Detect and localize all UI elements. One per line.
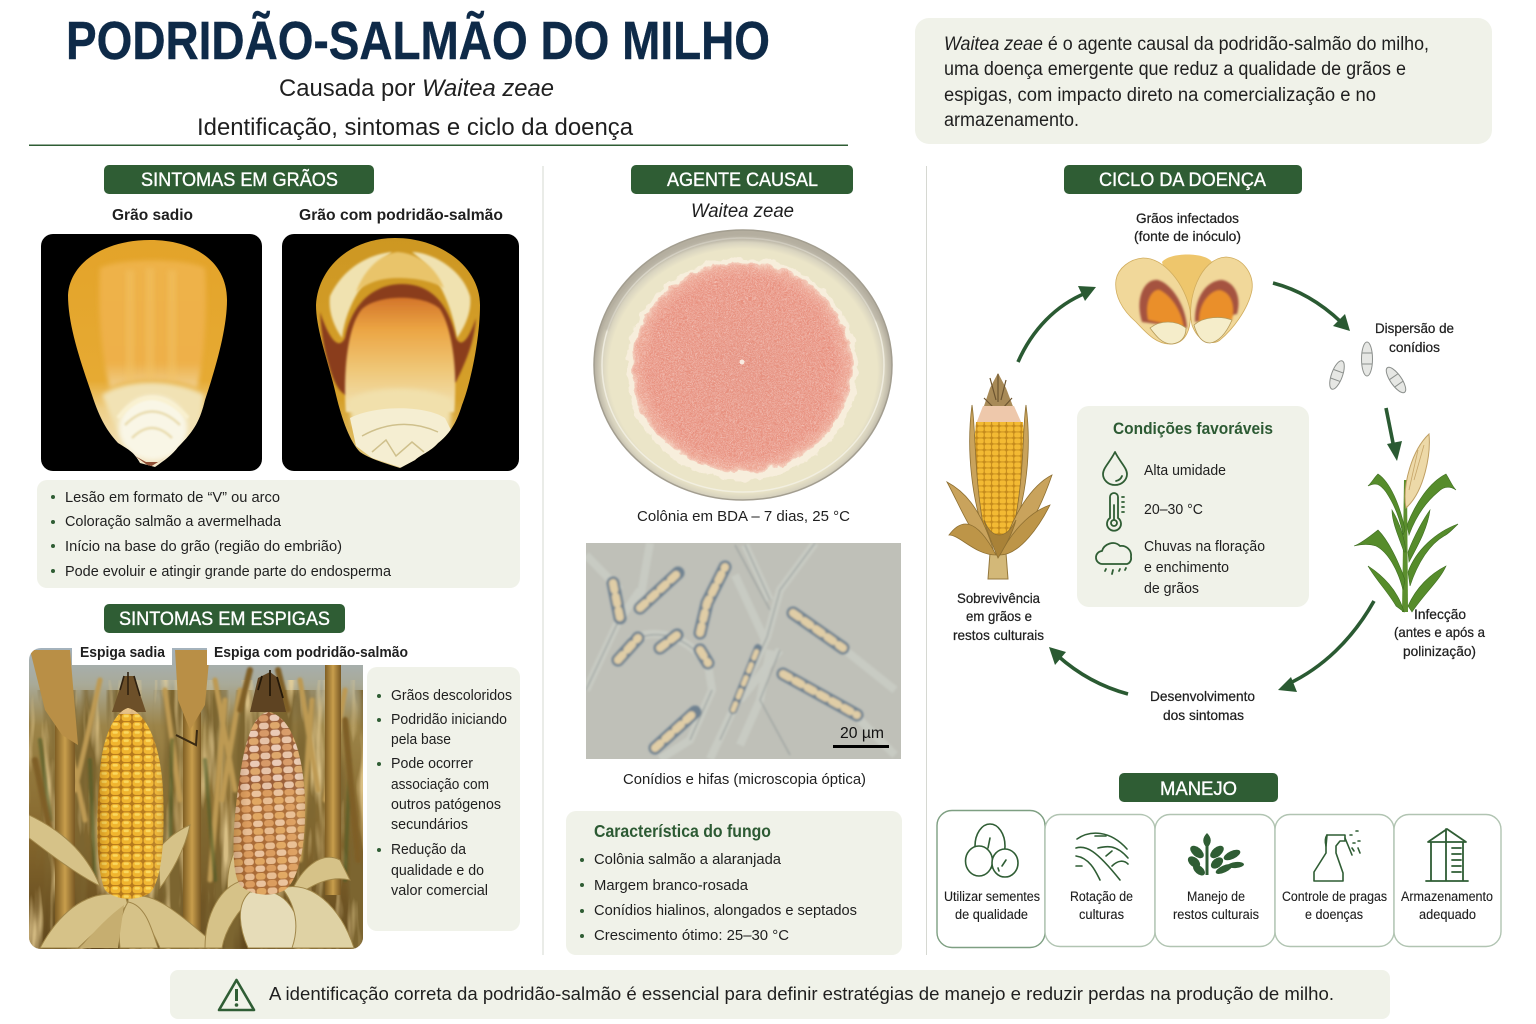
label: grão sadio: Grão sadio [112, 207, 193, 224]
card: controle de pragas [1275, 814, 1394, 946]
cycle label: sobrevivência: restos culturais [953, 627, 1044, 643]
illustration: maize plant [1354, 434, 1458, 612]
arrow: desenvolvimento to sobrevivência [1049, 647, 1128, 694]
photo: healthy kernel [41, 234, 262, 471]
label tab: espiga sadia: Espiga sadia [80, 645, 166, 661]
caption: conídios: Conídios e hifas (microscopia óptica) [623, 772, 866, 788]
icon: crop fields [1076, 833, 1128, 880]
photo: corn ears in field [29, 648, 363, 949]
panel: sintomas em espigas list: Podridão iniciando [391, 712, 507, 728]
cycle label: infecção: polinização) [1403, 643, 1476, 659]
cycle label: infecção [1394, 606, 1485, 659]
cycle label: sobrevivência: em grãos e [966, 608, 1032, 624]
panel: condições favoráveis: Chuvas na floração [1144, 539, 1265, 555]
icon: crop residue [1186, 833, 1244, 878]
card: sementes de qualidade: de qualidade [955, 907, 1028, 922]
heading: manejo: MANEJO [1160, 778, 1237, 800]
icon: warning triangle [219, 980, 254, 1010]
panel: sintomas em espigas list: Pode ocorrer [391, 756, 473, 772]
heading: manejo [1119, 773, 1278, 802]
cycle label: infecção: (antes e após a [1394, 624, 1485, 640]
intro text panel: Waitea zeae é o agente causal da podridão-salmão do milho, [944, 34, 1429, 55]
species name: Waitea zeae [691, 201, 794, 222]
title: PODRIDÃO-SALMÃO DO MILHO [66, 11, 770, 71]
cycle label: grãos infectados: Grãos infectados [1136, 210, 1239, 226]
panel: característica do fungo [566, 811, 902, 955]
icon: spray bottle [1314, 831, 1360, 881]
cycle label: desenvolvimento: Desenvolvimento [1150, 688, 1255, 704]
intro text panel [915, 18, 1492, 144]
icon: rain cloud [1096, 543, 1131, 574]
panel: característica do fungo: Conídios hialinos, alongados e septados [594, 903, 857, 919]
card: armazenamento: adequado [1419, 907, 1476, 922]
label: grão com podridão-salmão: Grão com podridão-salmão [299, 207, 503, 224]
panel: sintomas em grãos list: Lesão em formato de “V” ou arco [65, 490, 280, 506]
heading: ciclo da doença [1064, 165, 1302, 194]
heading: ciclo da doença: CICLO DA DOENÇA [1099, 169, 1266, 191]
panel: sintomas em grãos list: Coloração salmão a avermelhada [65, 514, 282, 530]
cycle label: grãos infectados: (fonte de inóculo) [1134, 228, 1241, 244]
icon: seeds [966, 824, 1018, 877]
panel: característica do fungo: Característica do fungo [594, 821, 771, 841]
panel: sintomas em espigas list: valor comercial [391, 883, 488, 899]
cycle label: dispersão de conídios: conídios [1389, 339, 1440, 355]
icon: water drop [1103, 452, 1127, 485]
panel: sintomas em espigas list: associação com [391, 777, 489, 793]
cycle label: grãos infectados [1134, 210, 1241, 244]
panel: condições favoráveis: de grãos [1144, 581, 1199, 597]
panel: sintomas em espigas list [367, 667, 520, 931]
arrow: grãos to dispersão [1273, 283, 1350, 331]
cycle label: desenvolvimento [1150, 688, 1255, 723]
panel: característica do fungo: Colônia salmão a alaranjada [594, 852, 782, 868]
panel: condições favoráveis [1077, 406, 1309, 607]
photo: microscopy of conidia and hyphae [586, 543, 901, 759]
heading: sintomas em espigas: SINTOMAS EM ESPIGAS [119, 608, 330, 630]
icon: conidia [1327, 342, 1409, 395]
arrow: sobrevivência to grãos [1018, 286, 1096, 362]
illustration: corn ear [947, 373, 1052, 579]
intro text panel: espigas, com impacto direto na comercialização e no [944, 85, 1376, 106]
photo: microscopy of conidia and hyphae: 20 µm [840, 725, 884, 742]
label tab: espiga com podridão-salmão: Espiga com podridão-salmão [214, 645, 408, 661]
card: sementes de qualidade [937, 810, 1045, 948]
arrow: dispersão to infecção [1386, 408, 1402, 461]
cycle label: sobrevivência [953, 590, 1044, 643]
card: armazenamento: Armazenamento [1401, 889, 1493, 904]
icon: storage silo [1426, 829, 1468, 881]
tagline: Identificação, sintomas e ciclo da doença [197, 114, 634, 141]
subtitle: Causada por Waitea zeae [279, 75, 554, 102]
panel: sintomas em espigas list: pela base [391, 732, 451, 748]
arrow: infecção to desenvolvimento [1278, 601, 1374, 692]
cycle label: desenvolvimento: dos sintomas [1163, 707, 1244, 723]
photo: petri dish colony [594, 230, 892, 500]
intro text panel: armazenamento. [944, 110, 1079, 131]
card: restos culturais: restos culturais [1173, 907, 1259, 922]
icon: thermometer [1107, 493, 1124, 531]
photo: diseased kernel [282, 234, 519, 471]
panel: sintomas em grãos list: Pode evoluir e atingir grande parte do endosperma [65, 564, 392, 580]
intro text panel: uma doença emergente que reduz a qualidade de grãos e [944, 59, 1406, 80]
heading: agente causal [631, 165, 853, 194]
cycle label: dispersão de conídios: Dispersão de [1375, 320, 1454, 336]
panel: sintomas em espigas list: outros patógenos [391, 797, 501, 813]
panel: condições favoráveis: Condições favoráveis [1113, 419, 1273, 438]
panel: sintomas em espigas list: Grãos descoloridos [391, 688, 512, 704]
panel: sintomas em grãos list [37, 480, 520, 588]
panel: sintomas em grãos list: Início na base do grão (região do embrião) [65, 539, 342, 555]
cycle label: dispersão de conídios [1375, 320, 1454, 355]
cycle label: infecção: Infecção [1414, 606, 1466, 622]
card: armazenamento [1394, 814, 1501, 946]
cycle label: sobrevivência: Sobrevivência [957, 590, 1040, 606]
panel: sintomas em espigas list: qualidade e do [391, 863, 484, 879]
caption: colônia: Colônia em BDA – 7 dias, 25 °C [637, 509, 850, 525]
panel: condições favoráveis: 20–30 °C [1144, 502, 1203, 518]
card: controle de pragas: Controle de pragas [1282, 889, 1387, 904]
card: controle de pragas: e doenças [1305, 907, 1363, 922]
bottom callout: A identificação correta da podridão-salmão é essencial para definir estratégias de manejo e reduzir perdas na produção de milho. [269, 984, 1334, 1004]
panel: condições favoráveis: e enchimento [1144, 560, 1229, 576]
heading: agente causal: AGENTE CAUSAL [667, 169, 818, 191]
panel: característica do fungo: Crescimento ótimo: 25–30 °C [594, 928, 789, 944]
card: sementes de qualidade: Utilizar sementes [944, 889, 1040, 904]
card: rotação de culturas: Rotação de [1070, 889, 1133, 904]
card: rotação de culturas [1045, 814, 1155, 946]
illustration: infected kernels [1116, 254, 1252, 344]
heading: sintomas em grãos: SINTOMAS EM GRÃOS [141, 167, 338, 191]
panel: sintomas em espigas list: Redução da [391, 842, 467, 858]
heading: sintomas em grãos [104, 165, 374, 194]
panel: condições favoráveis: Alta umidade [1144, 463, 1226, 479]
card: restos culturais [1155, 814, 1275, 946]
panel: sintomas em espigas list: secundários [391, 817, 468, 833]
card: restos culturais: Manejo de [1187, 889, 1245, 904]
panel: característica do fungo: Margem branco-rosada [594, 878, 749, 894]
bottom callout [170, 970, 1390, 1019]
card: rotação de culturas: culturas [1079, 907, 1124, 922]
